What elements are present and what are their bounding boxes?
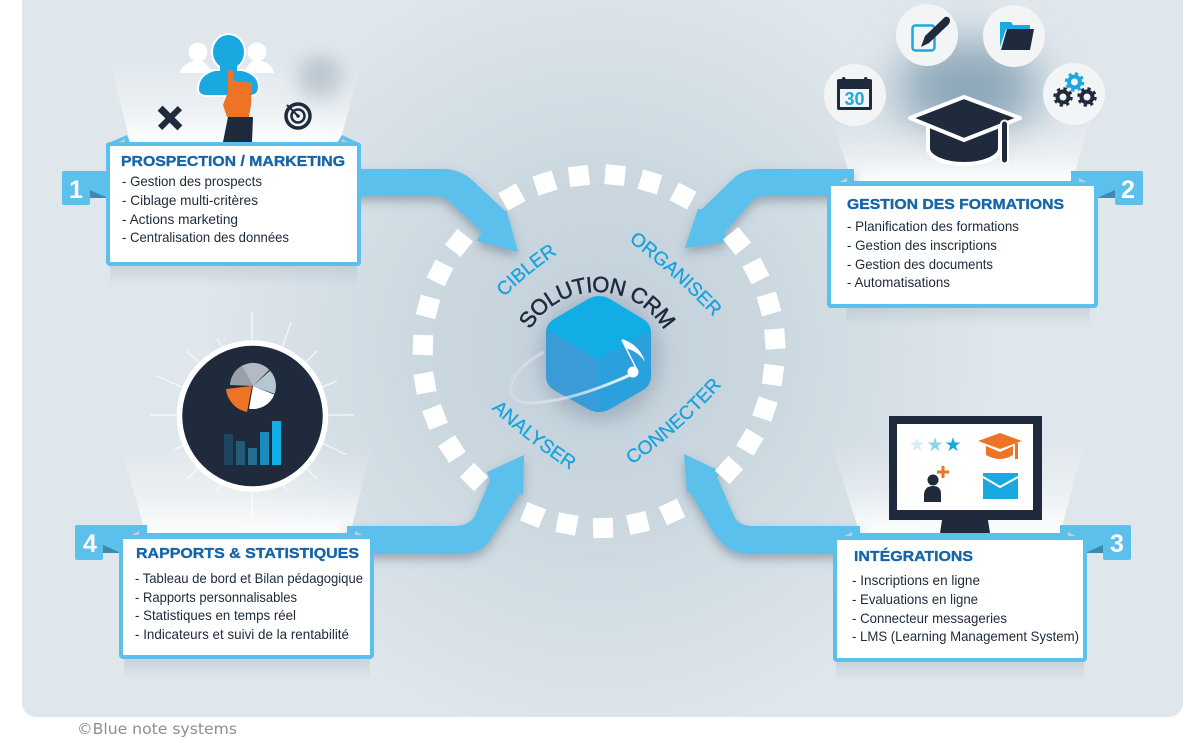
list [135,570,363,642]
card [829,184,1096,306]
icon: monitor [889,416,1042,533]
list [852,572,1079,644]
list: - Tableau de bord et Bilan pédagogique [135,570,363,586]
card [108,144,359,264]
rating stars: ★ [944,435,962,456]
white users [180,42,274,73]
curved title: SOLUTION CRM: SOLUTION CRM [520,276,676,329]
icon: pencil and ruler [158,106,182,130]
card corners [833,529,1087,550]
card [121,537,372,657]
arrow 4 [347,455,524,554]
list: - Gestion des inscriptions [847,237,997,253]
arrow 2 [685,169,854,248]
rating stars: ★ [908,435,926,456]
list: - Gestion des prospects [122,173,262,189]
soft shadow behind marketing icons [298,58,342,102]
label: ORGANISER: ORGANISER [632,233,721,316]
number tab 2 [1071,171,1143,205]
number tab 1: 1 [69,176,83,204]
icon: graduation cap [910,97,1020,164]
orange hand [223,70,252,117]
sleeve [223,117,253,142]
panel 1: prospection marketing [62,135,361,286]
number tab 4 [75,525,147,560]
number tab 3 [1060,525,1131,560]
shadow under card [124,659,370,679]
shadow under card [836,662,1084,682]
bar chart [224,421,281,465]
orbit swoosh [511,352,630,403]
heading: GESTION DES FORMATIONS [847,196,1064,213]
card [835,538,1085,660]
central logo: CRM cube [511,290,660,420]
icon: users with pointing hand [180,35,274,142]
list: - Indicateurs et suivi de la rentabilité [135,626,349,642]
list: - Evaluations en ligne [852,591,978,607]
blue user [199,35,258,95]
pie chart [226,363,276,412]
light beam: rapports [120,445,372,534]
card corners [119,526,374,550]
panel 4: rapports et statistiques [75,525,374,679]
list: - Inscriptions en ligne [852,572,980,588]
icon: target [286,104,310,128]
card corners [827,177,1098,200]
shadow under card [846,308,1090,326]
list: - Gestion des documents [847,256,993,272]
list [847,218,1019,290]
label: CIBLER: CIBLER [498,245,557,294]
envelope [983,473,1018,499]
heading: INTÉGRATIONS [854,548,973,565]
list: - Rapports personnalisables [135,589,297,605]
list: - Centralisation des données [122,229,289,245]
list: - Ciblage multi-critères [122,192,258,208]
label: ANALYSER: ANALYSER [491,402,576,470]
heading: PROSPECTION / MARKETING [121,153,345,170]
orange cap [978,433,1022,459]
arrow 3 [684,454,860,554]
number tab 1 [62,171,110,205]
music note [622,339,645,378]
rating stars: ★ [926,435,944,456]
panel 3: intégrations [833,525,1131,682]
icon: gears [1043,63,1105,125]
light beam: formations [832,120,1090,182]
card corners [106,135,361,160]
cube shadow [540,296,660,420]
icon: statistics medallion [150,312,354,518]
icon: calendar [824,64,886,126]
cube faces [546,296,651,412]
rays [150,312,354,518]
number tab 2: 2 [1121,176,1135,204]
heading: RAPPORTS & STATISTIQUES [136,545,359,562]
icon: edit pencil [896,4,958,66]
soft shadow behind graduation cap [896,40,1040,136]
list: - LMS (Learning Management System) [852,628,1079,644]
arrow 1 [350,169,518,252]
copyright: ©Blue note systems [77,720,237,738]
list: - Actions marketing [122,211,238,227]
list: - Planification des formations [847,218,1019,234]
panel 2: gestion des formations [827,171,1143,326]
list: - Automatisations [847,274,950,290]
list: - Statistiques en temps réel [135,607,296,623]
list: - Connecteur messageries [852,610,1007,626]
add user [924,466,949,502]
icon: calendar: 30 [844,89,865,109]
shadow under card [110,266,357,286]
list [122,173,289,245]
dashed ring of white squares [413,164,786,538]
number tab 4: 4 [83,530,97,558]
light beam: prospection [110,60,362,142]
icon: folder [983,5,1045,67]
rating stars [908,435,962,456]
light beam: intégrations [830,440,1085,534]
number tab 3: 3 [1110,530,1124,558]
label: CONNECTER: CONNECTER [627,378,722,462]
